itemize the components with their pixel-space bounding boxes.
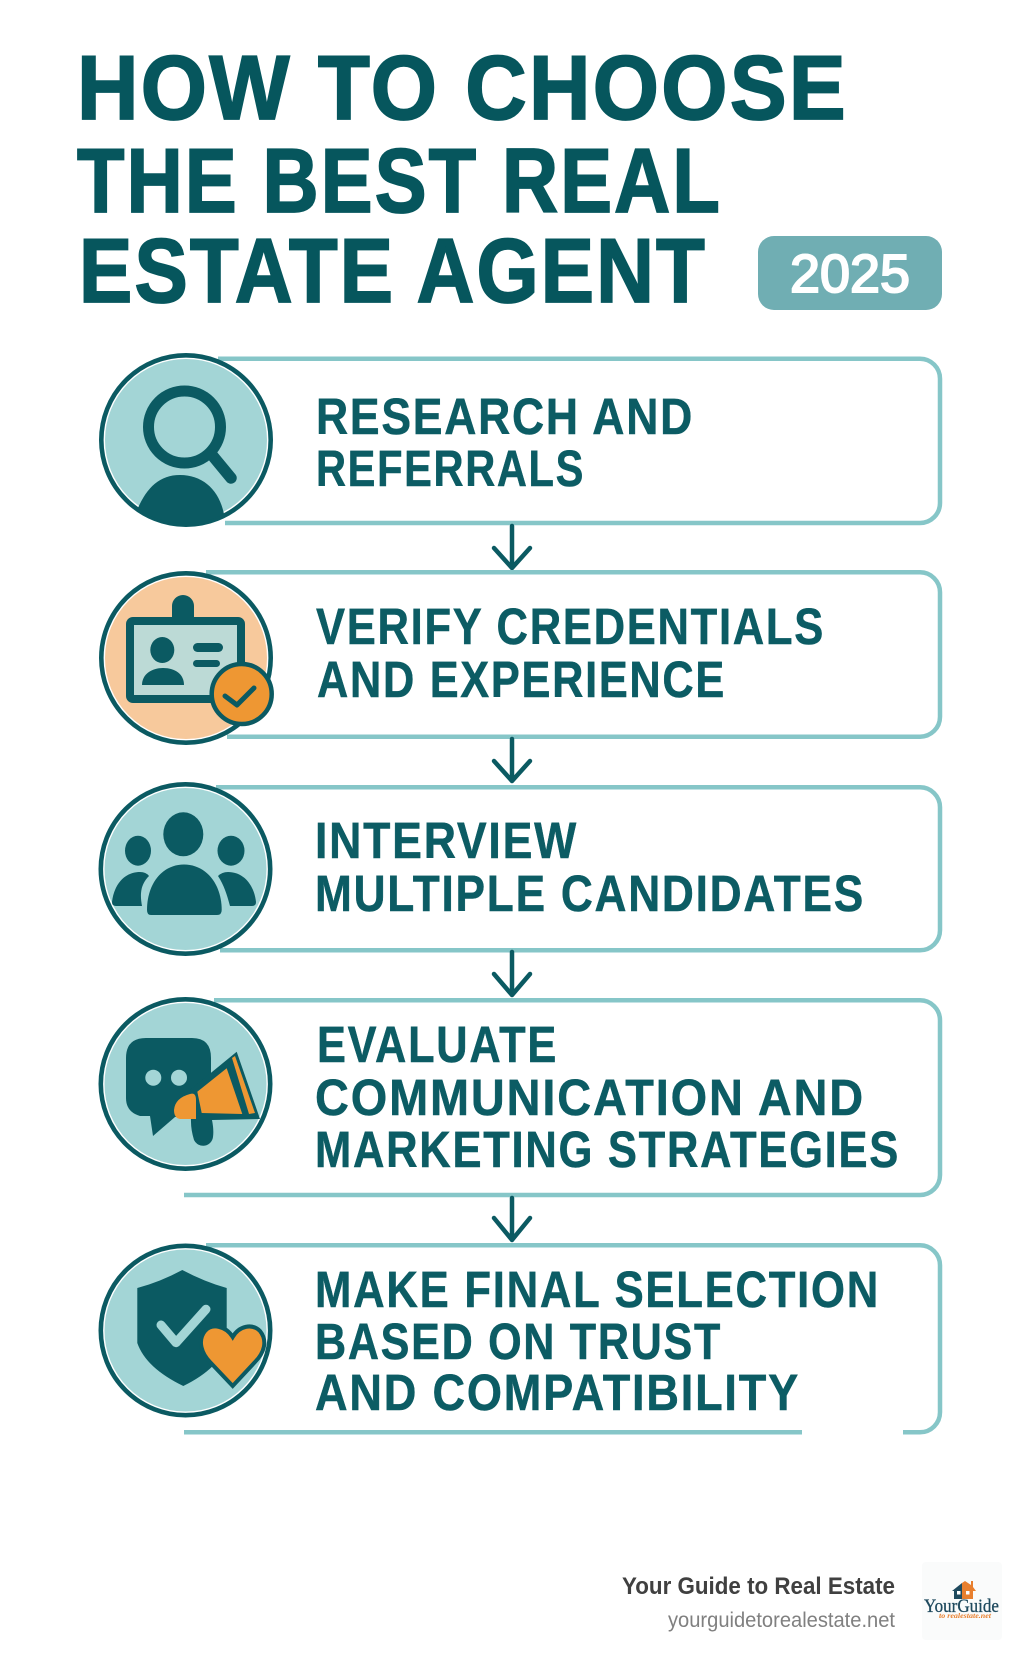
- year badge: [758, 236, 942, 310]
- panel: step 5 final selection: [101, 1245, 940, 1432]
- card outline: [218, 359, 940, 523]
- logo: [922, 1562, 1002, 1640]
- icon: house: [952, 1581, 976, 1599]
- step text: MULTIPLE CANDIDATES: [315, 865, 865, 922]
- panel: step 2 verify credentials: [101, 572, 940, 743]
- logo wordmark: to realestate.net: [939, 1611, 992, 1620]
- step text: AND COMPATIBILITY: [315, 1364, 800, 1421]
- icon: shield and heart: [101, 1246, 270, 1415]
- title: [77, 38, 848, 322]
- step text: INTERVIEW: [315, 812, 578, 869]
- logo wordmark: YourGuide: [924, 1596, 999, 1617]
- step text: MAKE FINAL SELECTION: [315, 1261, 880, 1318]
- footer brand text: yourguidetorealestate.net: [668, 1609, 895, 1632]
- step text: COMMUNICATION AND: [315, 1069, 865, 1126]
- icon: group of people: [101, 784, 270, 954]
- card outline: [184, 1000, 940, 1195]
- step text: [315, 1016, 900, 1178]
- step text: [316, 598, 825, 708]
- footer brand text: [622, 1573, 895, 1632]
- year badge: 2025: [790, 244, 910, 304]
- step text: BASED ON TRUST: [315, 1313, 722, 1370]
- step text: [315, 1261, 880, 1421]
- arrow 3: [494, 952, 530, 995]
- step text: [315, 812, 865, 922]
- icon: id badge with check: [101, 573, 272, 743]
- card outline: [184, 1245, 940, 1432]
- arrow 4: [494, 1198, 530, 1240]
- step text: RESEARCH AND: [316, 388, 694, 445]
- icon: magnifier over person: [101, 355, 271, 525]
- step text: VERIFY CREDENTIALS: [316, 598, 825, 655]
- panel: step 1 research and referrals: [101, 355, 940, 525]
- panel: step 3 interview candidates: [101, 784, 940, 954]
- icon: speech bubble and megaphone: [101, 999, 270, 1169]
- card outline: [216, 787, 940, 950]
- footer brand text: Your Guide to Real Estate: [622, 1573, 895, 1600]
- step text: REFERRALS: [316, 440, 585, 497]
- title: HOW TO CHOOSE: [77, 38, 848, 139]
- step text: AND EXPERIENCE: [317, 651, 726, 708]
- step text: MARKETING STRATEGIES: [315, 1121, 900, 1178]
- card outline: [206, 572, 940, 737]
- arrow 2: [494, 739, 530, 781]
- step text: [316, 388, 694, 497]
- arrow 1: [494, 526, 530, 568]
- step text: EVALUATE: [317, 1016, 558, 1073]
- panel: step 4 communication and marketing: [101, 999, 940, 1195]
- title: ESTATE AGENT: [79, 221, 707, 322]
- title: THE BEST REAL: [77, 131, 722, 232]
